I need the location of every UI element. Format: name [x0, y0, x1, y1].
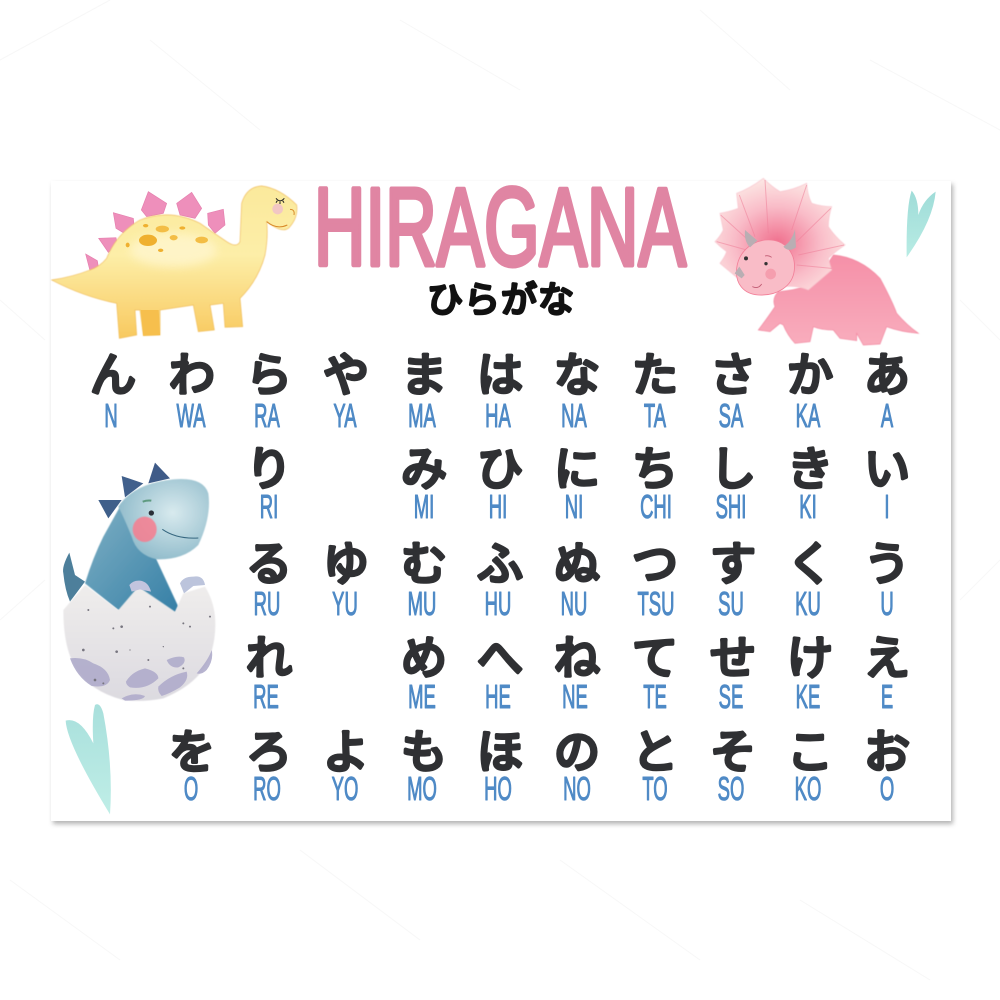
cell: つ TSU: TSU [638, 585, 674, 622]
cell: を O: を [169, 726, 215, 778]
cell: お O: O [880, 770, 894, 807]
cell: わ WA: WA [176, 397, 206, 434]
cell: ま MA [401, 349, 447, 434]
cell: ね NE [554, 632, 600, 715]
cell: も MO [401, 726, 447, 807]
cell: の NO: NO [563, 770, 591, 807]
cell: ろ RO: ろ [246, 726, 292, 778]
cell: ふ HU: ふ [477, 538, 523, 590]
cell: を O: O [184, 770, 198, 807]
cell: さ SA: SA [719, 397, 743, 434]
cell: え E [864, 632, 910, 715]
cell: め ME [401, 632, 447, 715]
cell: よ YO: よ [323, 726, 369, 778]
cell: ゆ YU: ゆ [323, 538, 369, 590]
cell: ゆ YU: YU [332, 585, 358, 622]
cell: ろ RO: RO [253, 770, 281, 807]
cell: あ A: あ [864, 349, 910, 401]
cell: こ KO: KO [795, 770, 821, 807]
cell: せ SE: SE [719, 678, 743, 715]
cell: ね NE: NE [562, 678, 588, 715]
cell: も MO: MO [407, 770, 437, 807]
cell: れ RE [246, 632, 292, 715]
cell: た TA: た [632, 349, 678, 401]
cell: か KA: か [787, 349, 833, 401]
cell: す SU [710, 538, 756, 622]
cell: う U: う [864, 538, 910, 590]
hiragana chart [90, 349, 910, 807]
cell: し SHI [710, 443, 756, 525]
subtitle: ひらがな [427, 279, 575, 320]
icon: heart leaf bottom left [66, 704, 111, 814]
cell: き KI [787, 443, 833, 525]
cell: は HA [477, 349, 523, 434]
cell: つ TSU: つ [632, 538, 678, 590]
poster board [51, 181, 953, 824]
cell: そ SO: そ [710, 726, 756, 778]
cell: か KA: KA [796, 397, 820, 434]
cell: の NO: の [554, 726, 600, 778]
cell: あ A: A [881, 397, 893, 434]
cell: と TO: TO [642, 770, 668, 807]
cell: わ WA [169, 349, 215, 434]
cell: あ A [864, 349, 910, 434]
cell: を O [169, 726, 215, 807]
cell: れ RE: れ [246, 632, 292, 684]
cell: ん N: ん [90, 349, 136, 401]
cell: は HA: HA [485, 397, 511, 434]
cell: み MI: み [401, 443, 447, 495]
cell: よ YO [323, 726, 369, 807]
cell: ぬ NU: ぬ [554, 538, 600, 590]
cell: や YA [323, 349, 369, 434]
cell: な NA: NA [561, 397, 587, 434]
cell: ろ RO [246, 726, 292, 807]
cell: こ KO: こ [787, 726, 833, 778]
cell: り RI [246, 443, 292, 525]
cell: い I [864, 443, 910, 525]
cell: さ SA: さ [710, 349, 756, 401]
cell: か KA [787, 349, 833, 434]
cell: ほ HO [477, 726, 523, 807]
cell: け KE: け [787, 632, 833, 684]
cell: き KI: KI [799, 488, 817, 525]
cell: し SHI: SHI [716, 488, 746, 525]
illustration: yellow stegosaurus [52, 186, 297, 338]
cell: に NI [554, 443, 600, 525]
cell: そ SO [710, 726, 756, 807]
cell: て TE: て [632, 632, 678, 684]
cell: ち CHI: ち [632, 443, 678, 495]
cell: く KU: く [787, 538, 833, 590]
title: HIRAGANA [314, 166, 686, 289]
cell: く KU [787, 538, 833, 622]
cell: と TO: と [632, 726, 678, 778]
cell: み MI: MI [414, 488, 434, 525]
cell: ぬ NU [554, 538, 600, 622]
cell: ひ HI: ひ [477, 443, 523, 495]
cell: ん N: N [104, 397, 118, 434]
cell: ら RA [246, 349, 292, 434]
cell: ち CHI: CHI [640, 488, 672, 525]
cell: も MO: も [401, 726, 447, 778]
cell: て TE [632, 632, 678, 715]
cell: い I: い [864, 443, 910, 495]
cell: ね NE: ね [554, 632, 600, 684]
cell: る RU [246, 538, 292, 622]
icon: heart leaf top right [907, 191, 936, 257]
cell: お O [864, 726, 910, 807]
cell: ふ HU [477, 538, 523, 622]
cell: ま MA: ま [401, 349, 447, 401]
cell: よ YO: YO [332, 770, 358, 807]
cell: に NI: NI [565, 488, 583, 525]
cell: め ME: ME [408, 678, 436, 715]
cell: わ WA: わ [169, 349, 215, 401]
cell: け KE: KE [796, 678, 820, 715]
cell: へ HE [477, 632, 523, 715]
cell: み MI [401, 443, 447, 525]
cell: め ME: め [401, 632, 447, 684]
cell: す SU: SU [718, 585, 744, 622]
cell: そ SO: SO [718, 770, 744, 807]
cell: い I: I [884, 488, 890, 525]
cell: し SHI: し [710, 443, 756, 495]
cell: ひ HI [477, 443, 523, 525]
illustration: blue dinosaur hatching from egg [63, 463, 215, 701]
cell: む MU: MU [408, 585, 436, 622]
cell: う U: U [880, 585, 894, 622]
cell: と TO [632, 726, 678, 807]
cell: せ SE: せ [710, 632, 756, 684]
cell: れ RE: RE [253, 678, 279, 715]
cell: お O: お [864, 726, 910, 778]
cell: す SU: す [710, 538, 756, 590]
cell: へ HE: HE [485, 678, 511, 715]
cell: ち CHI [632, 443, 678, 525]
cell: む MU [401, 538, 447, 622]
cell: に NI: に [554, 443, 600, 495]
cell: む MU: む [401, 538, 447, 590]
cell: な NA [554, 349, 600, 434]
cell: た TA [632, 349, 678, 434]
cell: な NA: な [554, 349, 600, 401]
cell: う U [864, 538, 910, 622]
cell: や YA: YA [333, 397, 357, 434]
cell: さ SA [710, 349, 756, 434]
cell: つ TSU [632, 538, 678, 622]
cell: は HA: は [477, 349, 523, 401]
cell: ら RA: RA [254, 397, 280, 434]
cell: ら RA: ら [246, 349, 292, 401]
cell: え E: え [864, 632, 910, 684]
cell: ひ HI: HI [489, 488, 507, 525]
cell: く KU: KU [795, 585, 821, 622]
cell: き KI: き [787, 443, 833, 495]
cell: り RI: り [246, 443, 292, 495]
cell: の NO [554, 726, 600, 807]
cell: え E: E [881, 678, 893, 715]
cell: へ HE: へ [477, 632, 523, 684]
cell: こ KO [787, 726, 833, 807]
cell: り RI: RI [260, 488, 278, 525]
cell: る RU: RU [254, 585, 280, 622]
cell: ぬ NU: NU [561, 585, 587, 622]
cell: て TE: TE [643, 678, 667, 715]
cell: ゆ YU [323, 538, 369, 622]
cell: け KE [787, 632, 833, 715]
cell: ふ HU: HU [485, 585, 511, 622]
cell: た TA: TA [644, 397, 666, 434]
cell: ん N [90, 349, 136, 434]
cell: せ SE [710, 632, 756, 715]
illustration: pink triceratops [715, 178, 918, 345]
cell: ま MA: MA [408, 397, 436, 434]
cell: る RU: る [246, 538, 292, 590]
cell: ほ HO: HO [484, 770, 512, 807]
cell: ほ HO: ほ [477, 726, 523, 778]
cell: や YA: や [323, 349, 369, 401]
